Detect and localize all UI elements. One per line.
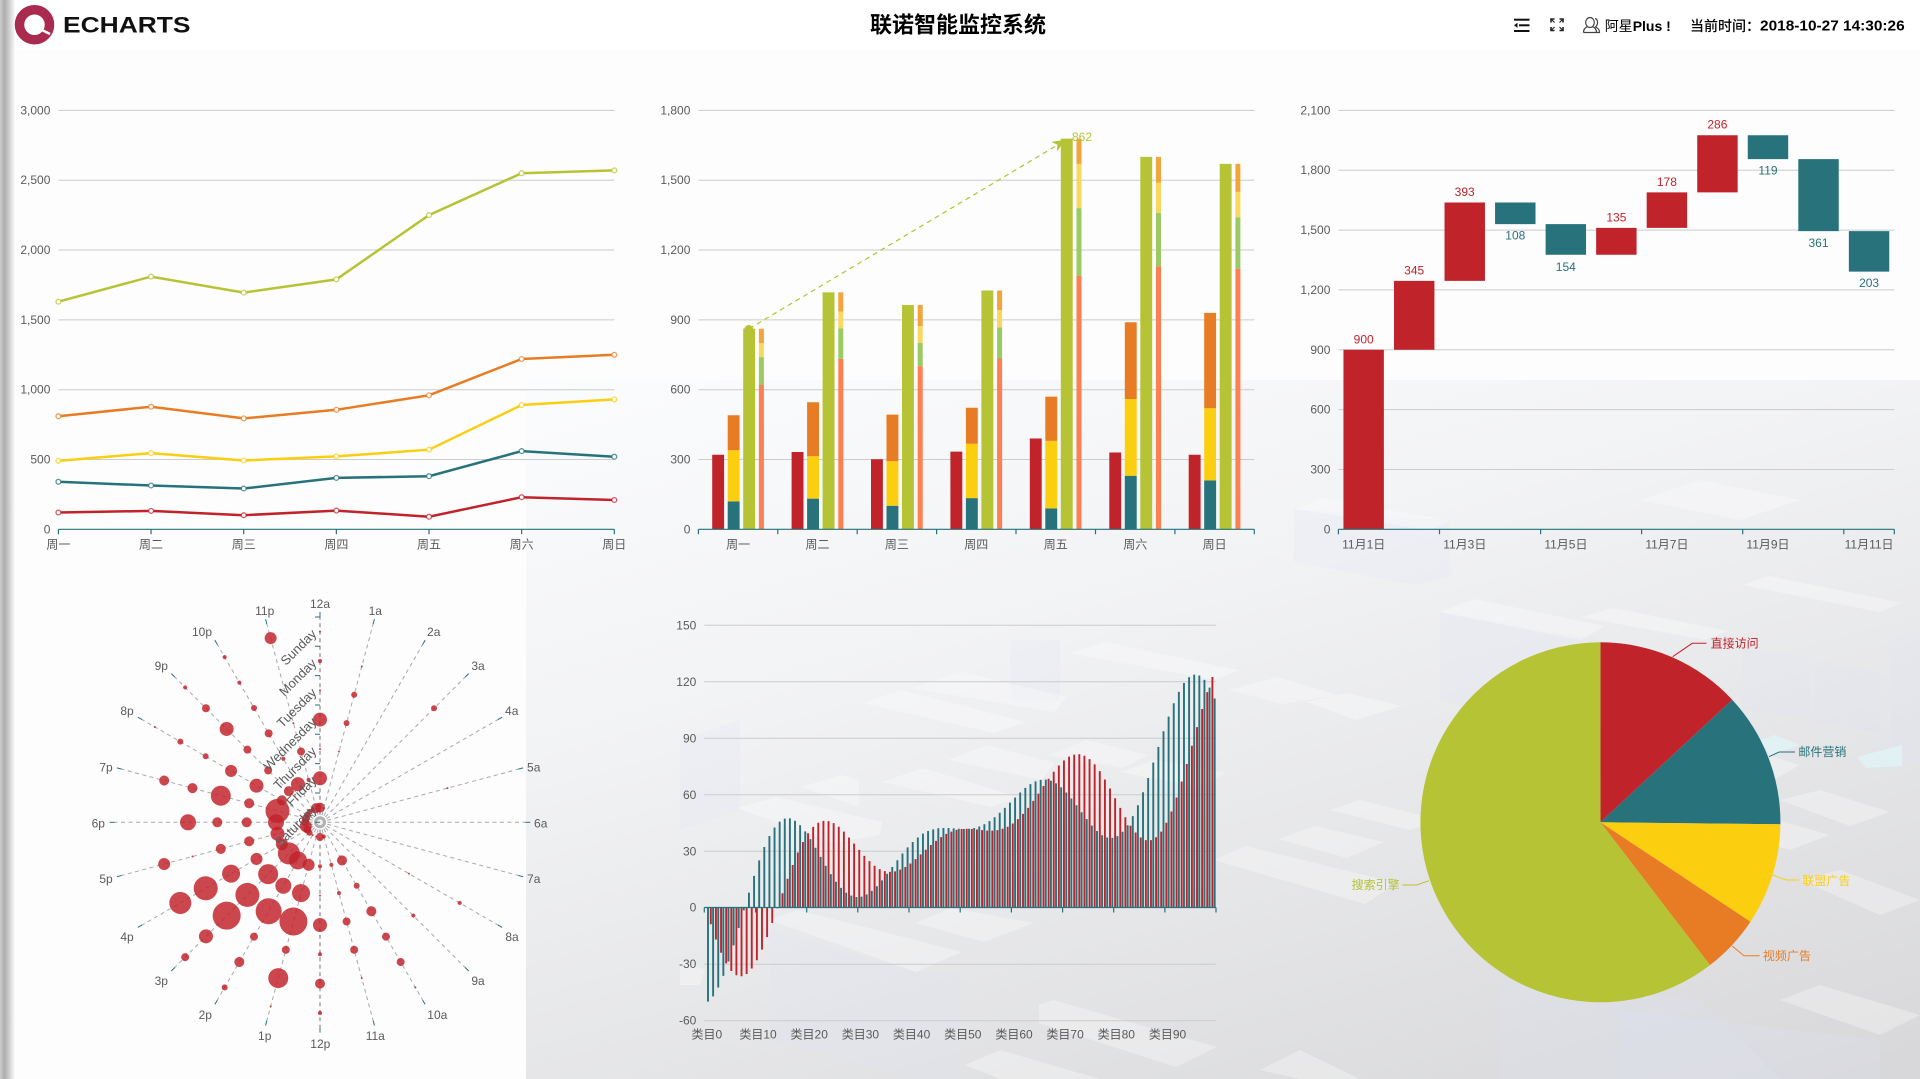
hour labels: 9a [471,974,485,988]
y axis labels: 1,500 [1300,223,1331,237]
y axis labels: 1,500 [660,173,691,187]
radial day labels: Friday [283,773,320,809]
value labels: 900 [1354,333,1374,347]
radial day labels: Wednesday [260,714,320,773]
radial day labels: Tuesday [274,685,320,731]
line: teal series [56,449,617,491]
icon: user [1584,18,1600,32]
y axis labels: 1,000 [20,383,51,397]
x axis: 周五 [1044,538,1068,552]
radial day labels: Saturday [272,802,320,850]
label: 邮件营销: 邮件营销 [1798,745,1846,759]
x axis: 11月3日 [1443,538,1486,552]
value labels: 135 [1606,210,1627,224]
hour labels: 7p [99,761,113,775]
y axis labels: 0 [44,522,51,536]
y axis labels: -30 [679,957,697,971]
hour labels: 10a [427,1008,448,1022]
hour labels: 8a [505,930,519,944]
slice: 搜索引擎 [1420,642,1710,1002]
slice: 邮件营销 [1600,700,1780,824]
y axis labels: 1,800 [660,103,691,117]
hour labels: 4a [505,704,519,718]
y axis labels: 900 [670,313,691,327]
hour labels: 9p [155,659,168,673]
x axis: 类目60 [995,1028,1033,1042]
hour labels: 7a [527,872,541,886]
x axis: 类目90 [1149,1028,1186,1042]
icon: fullscreen [1551,19,1563,30]
x axis: 周六 [1123,538,1147,552]
value labels: 203 [1859,276,1879,290]
x axis: 11月7日 [1645,538,1688,552]
x axis: 周六 [510,538,534,552]
hour labels: 3a [471,659,485,673]
panel: pie chart [1352,635,1850,1002]
panel: grouped stacked bar chart [660,103,1254,552]
bars: stacked orange [728,313,1216,461]
hour labels: 4p [120,930,134,944]
mark line arrow: 862 [1072,130,1092,144]
label: 视频广告: 视频广告 [1763,948,1811,963]
y axis labels: 3,000 [20,103,51,117]
x axis [692,908,1216,1042]
value labels: 361 [1808,236,1829,250]
label: 联盟广告: 联盟广告 [1802,874,1850,888]
y axis labels: 60 [683,788,697,802]
y axis labels: 600 [1310,403,1331,417]
logo: ECHARTS [63,12,191,38]
value labels: 345 [1404,263,1425,277]
value labels: 178 [1657,175,1677,189]
y axis labels: 1,200 [1300,283,1331,297]
y axis labels: 500 [30,452,51,466]
y axis labels: 1,500 [20,313,51,327]
bars: search green [743,139,1232,529]
y axis labels: 900 [1310,343,1331,357]
y axis labels: 1,800 [1300,163,1331,177]
hour labels: 11a [366,1029,385,1043]
hour labels: 1p [258,1029,272,1043]
hour labels: 6p [92,817,105,831]
label: 联盟广告 [1773,874,1850,888]
slice: 直接访问 [1600,642,1732,822]
bars: stacked yellow [728,399,1216,508]
title: 联诺智能监控系统 [870,12,1046,38]
y axis labels: 600 [670,383,691,397]
x axis: 周日 [602,538,626,552]
bars: stacked teal [728,476,1216,529]
x axis: 11月11日 [1845,538,1894,552]
x axis: 11月9日 [1746,538,1790,552]
hour labels: 11p [255,604,275,618]
icon: collapse menu [1514,19,1530,32]
hour labels: 10p [192,625,212,639]
bars: direct red [712,438,1201,529]
y axis labels: 90 [683,731,697,745]
hour labels: 12a [310,597,330,611]
radial day labels: Sunday [278,626,320,668]
x axis: 周一 [726,538,750,552]
hour labels [92,597,548,1051]
x axis: 11月1日 [1342,538,1385,552]
y axis labels: 300 [1310,462,1331,476]
y axis labels [20,103,51,536]
radial day labels: Monday [276,655,320,699]
hour labels: 1a [369,604,382,618]
bars: decreases [1495,135,1889,272]
label: 直接访问 [1673,635,1759,657]
panel: waterfall chart [1300,103,1894,552]
line: green series [56,168,617,304]
hour labels: 2a [427,625,441,639]
slice: 联盟广告 [1600,822,1780,922]
value labels: 108 [1505,229,1526,243]
hour labels: 5a [527,761,541,775]
value labels: 119 [1758,164,1778,178]
x axis: 周三 [232,538,256,552]
mark line arrow [744,130,1092,334]
value labels: 393 [1455,185,1475,199]
value labels [1354,118,1879,347]
x axis [46,529,626,552]
line: yellow series [56,397,617,463]
y axis labels: 2,000 [20,243,51,257]
hour labels: 2p [199,1008,212,1022]
y axis labels: 120 [676,675,697,689]
x axis: 周四 [964,538,988,552]
x axis: 类目0 [692,1028,723,1042]
label: 视频广告 [1732,946,1811,963]
current time [1690,18,1905,34]
hour labels: 6a [534,817,548,831]
bars: thin light yellow [759,164,1240,357]
y axis labels: 0 [1324,522,1331,536]
bars: increases [1343,135,1738,529]
x axis: 类目10 [739,1028,777,1042]
x axis: 类目80 [1098,1028,1135,1042]
x axis [1338,529,1894,552]
y axis labels [660,103,691,536]
x axis: 周二 [805,538,830,552]
x axis: 类目30 [842,1028,879,1042]
radial day labels: Thursday [270,743,320,793]
y axis labels: 1,200 [660,243,691,257]
x axis: 11月5日 [1544,538,1587,552]
x axis: 周日 [1203,538,1227,552]
line: orange series [56,352,617,421]
value labels: 286 [1707,118,1728,132]
bars: thin light green [759,208,1240,385]
x axis: 周五 [417,538,441,552]
user name: 阿星Plus ! [1605,18,1671,34]
x axis: 周三 [885,538,909,552]
y axis labels: 0 [684,522,691,536]
header bar [20,10,1905,40]
label: 搜索引擎: 搜索引擎 [1352,877,1400,892]
line: red series [56,495,617,519]
current time: 2018-10-27 14:30:26 [1760,18,1905,34]
panel: polar punch card [92,597,548,1051]
y axis labels: 0 [690,900,697,914]
y axis labels: 2,100 [1300,103,1331,117]
x axis [698,529,1254,552]
y axis labels: 30 [683,844,697,858]
value labels: 154 [1556,260,1576,274]
panel: dual series bar chart [676,618,1216,1042]
radial day labels [260,626,320,850]
bars: teal series [708,675,1215,1002]
hour labels: 5p [99,872,113,886]
y axis labels: 150 [676,618,697,632]
hour labels: 12p [310,1037,331,1051]
logo [20,10,191,40]
x axis: 类目70 [1046,1028,1084,1042]
panel: stacked line chart [20,103,626,552]
label: 搜索引擎 [1352,877,1429,892]
x axis: 周四 [324,538,348,552]
hour labels: 8p [120,704,134,718]
bars: red series [711,677,1212,976]
bars: thin amber [759,139,1240,343]
y axis labels: 2,500 [20,173,51,187]
x axis: 周二 [139,538,163,552]
slice: 视频广告 [1600,822,1750,965]
current time: 当前时间： [1690,18,1760,34]
label: 直接访问: 直接访问 [1711,635,1759,650]
y axis labels [1300,103,1331,536]
x axis: 类目40 [893,1028,931,1042]
label: 邮件营销 [1769,745,1846,759]
y axis labels [676,618,697,1028]
x axis: 类目20 [791,1028,828,1042]
spokes and bubbles [110,612,530,1033]
bars: thin coral [759,266,1240,529]
y axis labels: 300 [670,452,691,466]
x axis: 类目50 [944,1028,982,1042]
y axis labels: -60 [679,1014,697,1028]
hour labels: 3p [155,974,168,988]
x axis: 周一 [46,538,70,552]
